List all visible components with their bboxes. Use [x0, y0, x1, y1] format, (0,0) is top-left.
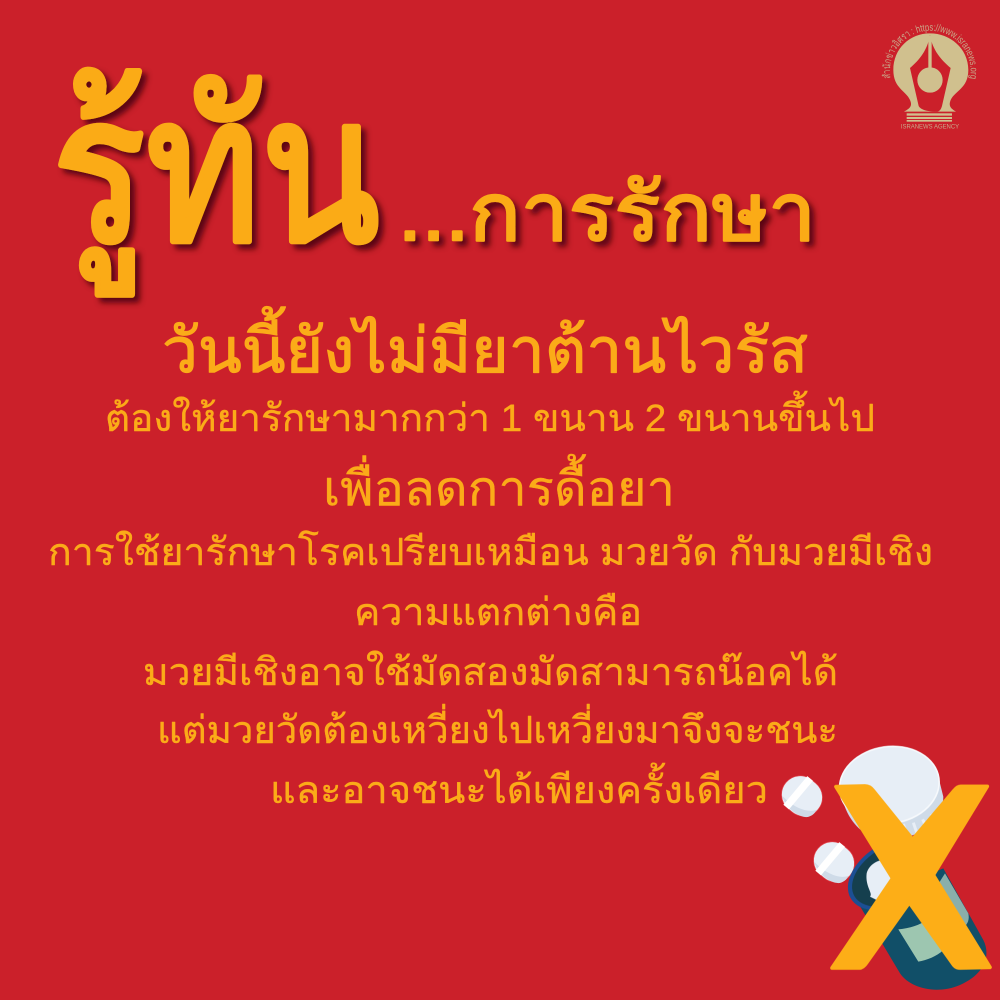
- icon: crossed-out medicine bottle: [774, 740, 990, 990]
- bottle reflection: [937, 873, 969, 932]
- text line: reduce drug resistance: เพื่อลดการดื้อยา: [323, 454, 675, 516]
- text line: combination therapy: ต้องให้ยารักษามากกว่า 1 ขนาน 2 ขนานขึ้นไป: [105, 390, 875, 440]
- title: [52, 56, 816, 295]
- title main word: รู้ทัน: [52, 56, 380, 295]
- text line: skilled boxer: มวยมีเชิงอาจใช้มัดสองมัดสามารถน๊อคได้: [143, 651, 838, 694]
- text line: the difference: ความแตกต่างคือ: [354, 592, 642, 634]
- cross mark: [832, 786, 990, 968]
- text line: boxing analogy: การใช้ยารักษาโรคเปรียบเหมือน มวยวัด กับมวยมีเชิง: [48, 530, 933, 574]
- title second word: ...การรักษา: [398, 168, 816, 257]
- bottle cap: [834, 740, 944, 838]
- bottle label: [898, 920, 943, 962]
- text line: win only once: และอาจชนะได้เพียงครั้งเดียว: [270, 762, 768, 812]
- pill inside bottle: [866, 860, 903, 902]
- text line: temple boxer: แต่มวยวัดต้องเหวี่ยงไปเหวี่ยงมาจึงจะชนะ: [157, 704, 838, 752]
- bottle mouth: [835, 821, 953, 926]
- logo agency name: ISRANEWS AGENCY: [901, 124, 960, 131]
- logo: Isranews Agency: [882, 24, 976, 131]
- pill: lower left: [806, 834, 862, 890]
- logo curved caption: สำนักข่าวอิศรา : https://www.isranews.org: [882, 24, 976, 79]
- subheading: วันนี้ยังไม่มียาต้านไวรัส: [162, 306, 808, 386]
- pill: upper left: [774, 768, 830, 824]
- bottle body: [858, 868, 986, 990]
- logo pen nib bulb: [893, 33, 968, 122]
